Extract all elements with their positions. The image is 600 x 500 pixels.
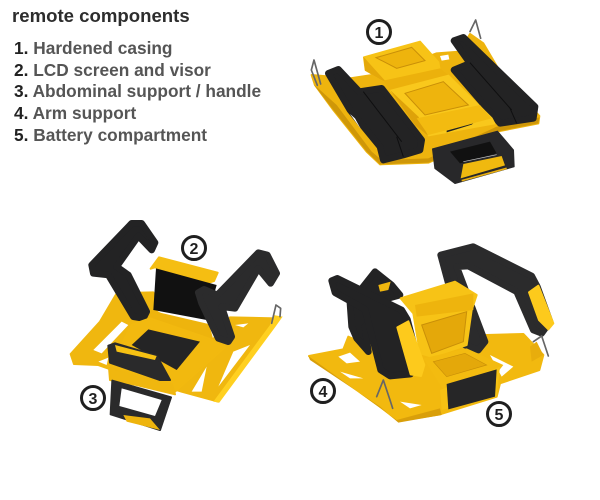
component list [14, 38, 261, 145]
device view 1: closed remote [311, 20, 539, 183]
number badge 2: 2 [190, 241, 199, 258]
item 5: 5. Battery compartment [14, 125, 207, 145]
number badge 5 [488, 402, 510, 426]
device view 3: rear with battery compartment [308, 247, 553, 423]
item 3: 3. Abdominal support / handle [14, 81, 261, 101]
item 1: 1. Hardened casing [14, 38, 172, 58]
number badge 3 [82, 386, 104, 410]
number badge 4 [312, 380, 334, 402]
device view 2: open with LCD screen [71, 223, 283, 430]
number badge 2 [182, 236, 206, 260]
number badge 4: 4 [319, 384, 328, 401]
item 2: 2. LCD screen and visor [14, 60, 211, 80]
number badge 1: 1 [375, 25, 384, 42]
number badge 5: 5 [495, 407, 504, 424]
item 4: 4. Arm support [14, 103, 137, 123]
title: remote components [12, 5, 190, 26]
number badge 1 [368, 20, 390, 44]
number badge 3: 3 [89, 391, 98, 408]
